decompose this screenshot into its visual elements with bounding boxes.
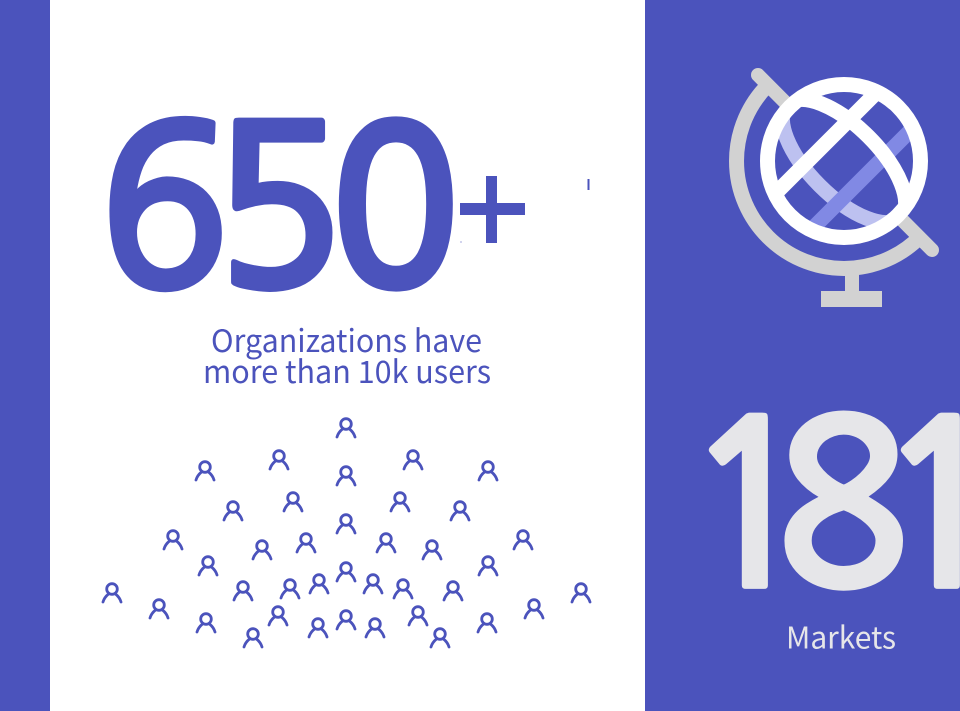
label: Markets: Markets [786,614,896,658]
panel: left band [0,0,50,711]
panel: right markets [645,0,960,711]
icon: globe [737,69,932,307]
caption: organizations [203,316,491,392]
caption: organizations: Organizations have [211,316,482,361]
caption: organizations: more than 10k users [203,347,491,392]
big number: 650+: 650 [96,100,463,323]
icon group: crowd of users [103,419,590,647]
